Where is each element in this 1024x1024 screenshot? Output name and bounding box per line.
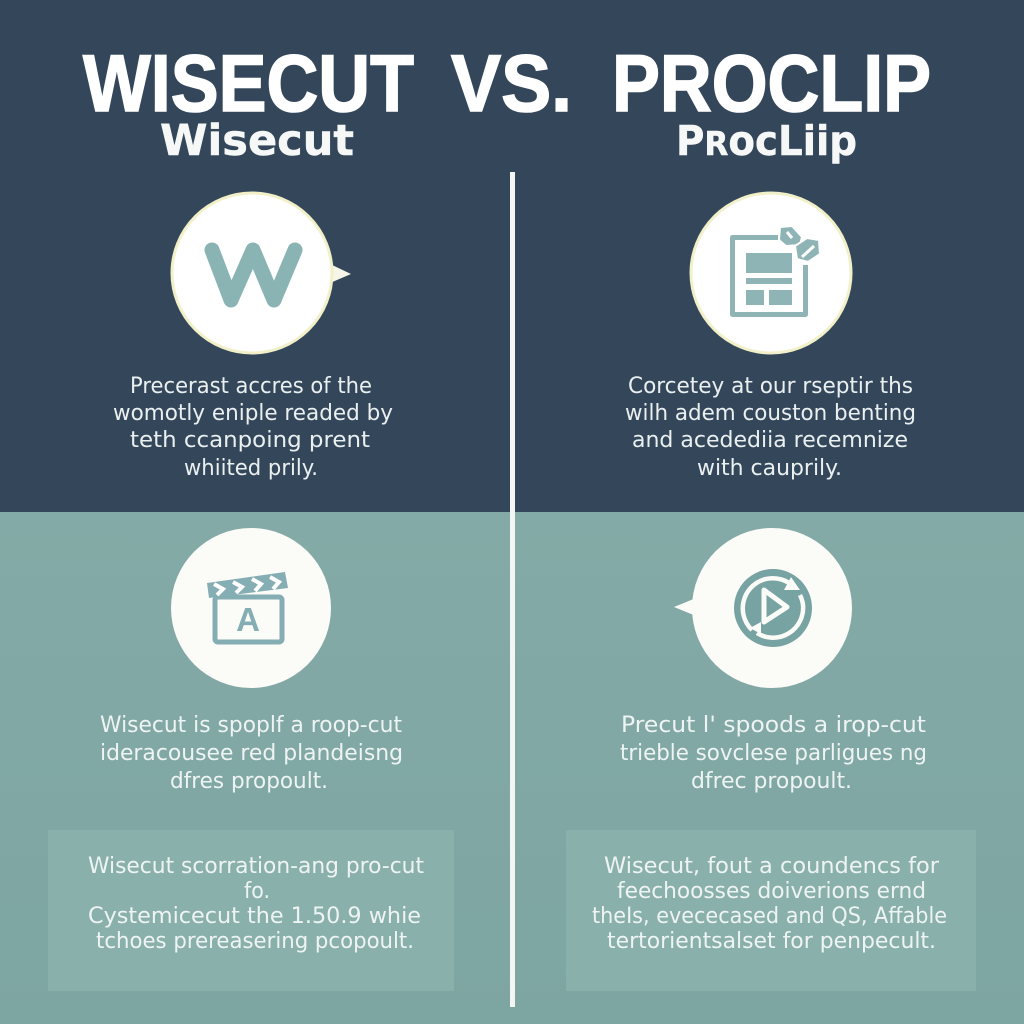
text: ProClip middle description: Precut l' spoods a irop-cut bbox=[621, 713, 926, 738]
title bbox=[83, 39, 931, 129]
text: Wisecut middle description: dfres propoult. bbox=[170, 769, 328, 794]
panel: ProClip summary: theIs, evececased and QS, Affable bbox=[592, 904, 947, 929]
panel: Wisecut summary: fo. bbox=[244, 879, 270, 904]
heading: Wisecut: Wisecut bbox=[160, 116, 354, 166]
text: ProClip top description: wilh adem couston benting bbox=[625, 401, 916, 426]
text: Wisecut middle description: Wisecut is spoplf a roop-cut bbox=[100, 713, 402, 738]
text: Wisecut top description: Precerast accres of the bbox=[130, 374, 372, 399]
text: ProClip middle description: trieble sovclese parligues ng bbox=[620, 741, 927, 766]
center divider bbox=[510, 172, 515, 1007]
text: ProClip top description bbox=[625, 374, 916, 481]
icon: Wisecut clapperboard: A bbox=[236, 601, 260, 638]
panel: Wisecut summary: Wisecut scorration-ang pro-cut bbox=[88, 854, 424, 879]
text: Wisecut middle description bbox=[100, 713, 403, 794]
panel: ProClip summary bbox=[566, 830, 976, 991]
title: WISECUT bbox=[83, 39, 414, 129]
text: ProClip top description: Corcetey at our rseptir ths bbox=[628, 374, 913, 399]
icon: Wisecut clapperboard bbox=[171, 528, 331, 688]
panel: ProClip summary: tertorientsalset for penpecult. bbox=[607, 929, 936, 954]
icon: Wisecut W badge bbox=[172, 193, 351, 353]
panel: ProClip summary: Wisecut, fout a coundencs for bbox=[604, 854, 940, 879]
text: ProClip middle description: dfrec propoult. bbox=[691, 769, 852, 794]
title: VS. bbox=[451, 39, 572, 129]
text: Wisecut top description: whiited prily. bbox=[184, 456, 318, 481]
text: ProClip top description: with cauprily. bbox=[697, 456, 842, 481]
text: Wisecut middle description: ideracousee red plandeisng bbox=[100, 741, 403, 766]
icon: ProClip document editor bbox=[691, 193, 851, 353]
text: Wisecut top description: teth ccanpoing prent bbox=[130, 428, 370, 453]
panel: Wisecut summary: tchoes prereasering pcopoult. bbox=[96, 929, 414, 954]
text: ProClip middle description bbox=[620, 713, 927, 794]
text: ProClip top description: and acedediia recemnize bbox=[632, 428, 908, 453]
bottom teal background bbox=[0, 512, 1024, 1024]
icon: ProClip replay play button bbox=[674, 528, 852, 688]
panel: Wisecut summary bbox=[48, 830, 454, 991]
panel: ProClip summary: feechoosses doiverions ernd bbox=[617, 879, 926, 904]
panel: Wisecut summary: Cystemicecut the 1.50.9 whie bbox=[88, 904, 421, 929]
text: Wisecut top description: womotly eniple readed by bbox=[113, 401, 393, 426]
text: Wisecut top description bbox=[113, 374, 393, 481]
title: PROCLIP bbox=[612, 39, 931, 129]
top dark background bbox=[0, 0, 1024, 512]
heading: ProcLiip: PRocLiip bbox=[676, 117, 857, 165]
